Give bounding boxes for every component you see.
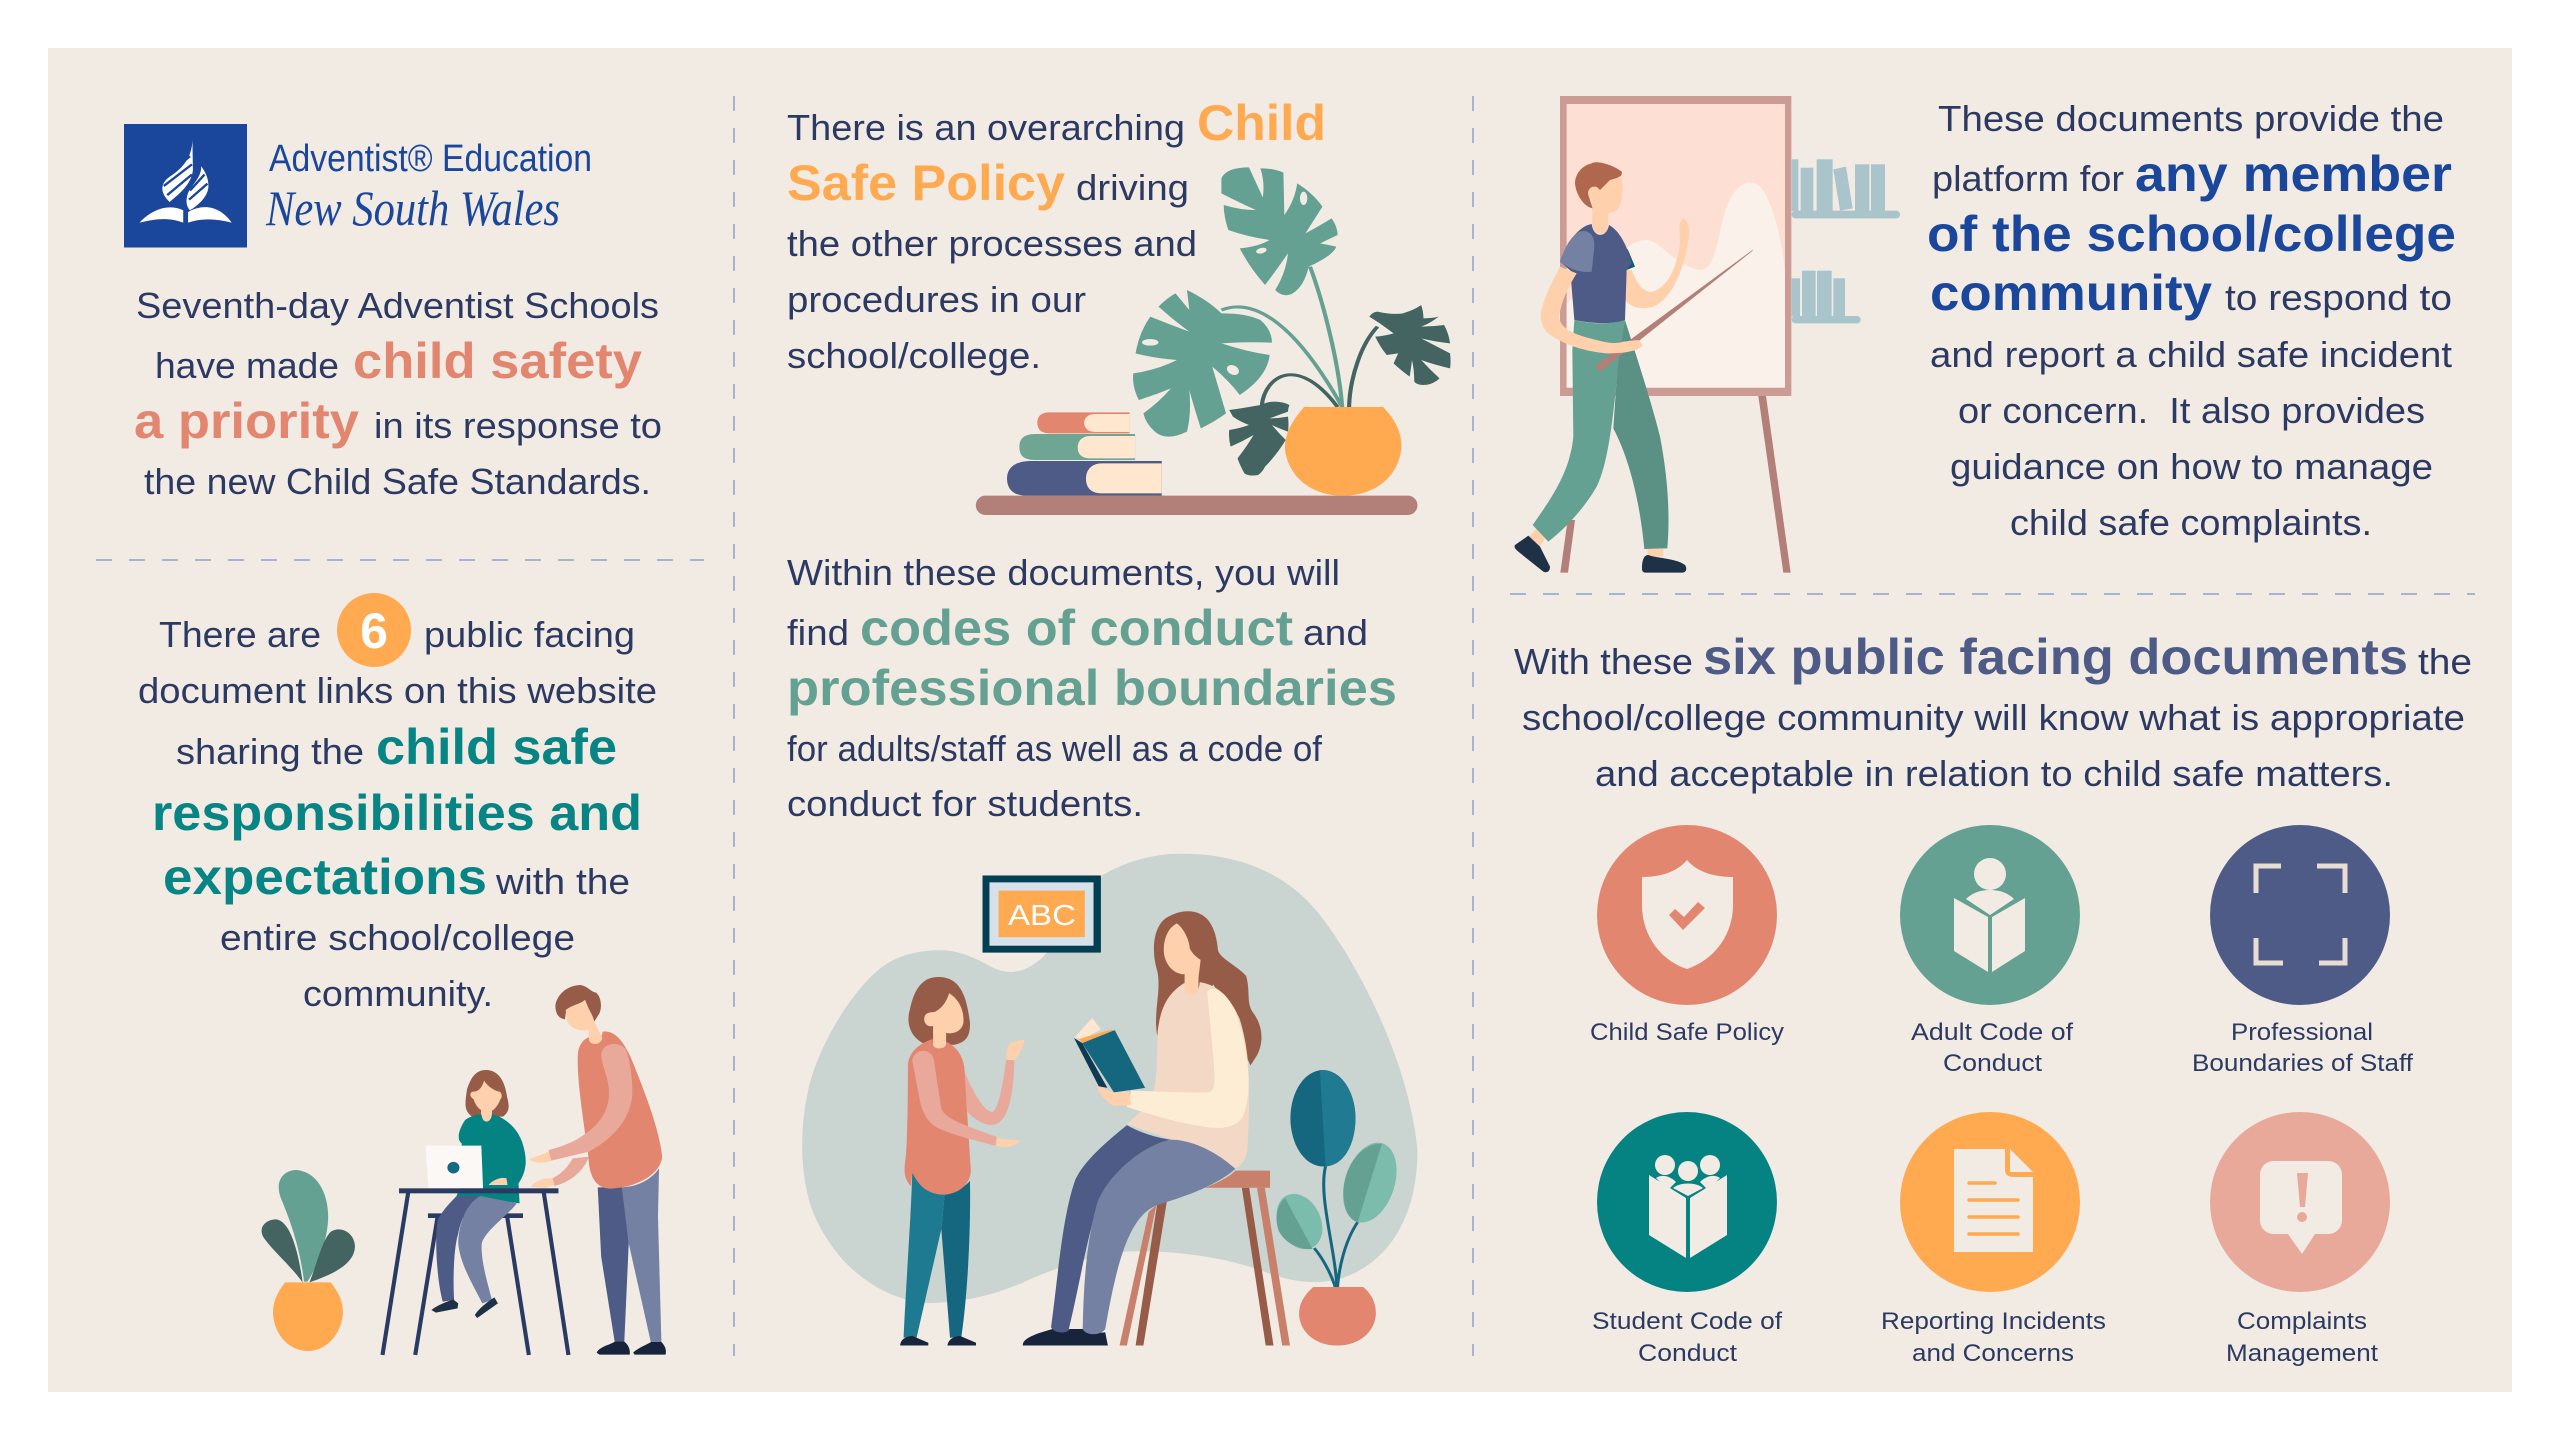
text: platform for any member [1927,98,2456,543]
text: codes of conduct: and [1303,612,1368,653]
intro text: child safety [353,333,642,389]
icon: Professional Boundaries of Staff: Professional [2231,1019,2373,1046]
intro text: a priority [134,393,359,449]
icon: Student Code of Conduct: Conduct [1638,1340,1737,1367]
icon: Adult Code of Conduct: Conduct [1943,1050,2042,1077]
icon: Reporting Incidents and Concerns: and Concerns [1912,1340,2074,1367]
text: platform for any member: of the school/college [1927,206,2456,262]
text: six public facing documents [1514,629,2472,794]
text: six public facing documents: six public facing documents [1703,629,2408,685]
illustration: teacher at easel with bookshelves [1515,96,1900,573]
panel: middle column [787,95,1451,1346]
text: platform for any member: These documents provide the [1938,98,2444,139]
text: six document links [138,593,657,1014]
person: teacher with pointer [1515,162,1753,573]
text: six document links: entire school/college [220,917,575,958]
illustration: staff helping student at desk [262,985,666,1355]
text: platform for any member: and report a child safe incident [1930,334,2452,375]
text: platform for any member: platform for [1932,158,2124,199]
panel: left column [124,124,666,1355]
intro text: in its response to [374,405,662,446]
text: platform for any member: any member [2135,146,2452,202]
text: codes of conduct: professional boundaries [787,660,1397,716]
text: child safe policy: driving [1076,167,1189,208]
illustration: woman reading to child: ABC [1008,900,1076,932]
text: six document links: child safe [376,719,617,775]
text: platform for any member: guidance on how to manage [1950,446,2433,487]
ABC frame [983,875,1101,953]
text: child safe policy: school/college. [787,335,1041,376]
text: child safe policy: Child [1197,95,1326,151]
logo: Adventist Education New South Wales: Adventist® Education [269,138,592,180]
panel: right column [1514,96,2472,1367]
desk top [399,1188,558,1193]
icon: Reporting Incidents and Concerns [1881,1112,2106,1367]
text: child safe policy [787,95,1326,376]
icon: Adult Code of Conduct: Adult Code of [1911,1019,2073,1046]
text: codes of conduct: for adults/staff as well as a code of [787,728,1323,769]
potted plant [1269,1070,1405,1346]
text: six document links: sharing the [176,731,364,772]
logo: Adventist Education New South Wales: New South Wales [265,180,560,236]
text: codes of conduct: Within these documents, you will [787,552,1340,593]
easel board [1560,96,1791,573]
desk legs and stool [383,1192,568,1355]
stack of books [1007,412,1162,496]
text: codes of conduct: codes of conduct [860,600,1293,656]
text: six document links: with the [495,861,630,902]
text: six public facing documents: With these [1514,641,1693,682]
icon: Student Code of Conduct: Student Code of [1592,1308,1782,1335]
text: child safe policy: procedures in our [787,279,1086,320]
person: seated student [426,1070,526,1318]
person: standing teacher [529,985,666,1355]
icon: Complaints Management [2210,1112,2390,1367]
text: platform for any member: child safe complaints. [2010,502,2372,543]
icon: Adult Code of Conduct [1900,825,2080,1077]
text: six document links: expectations [163,849,487,905]
text: child safe policy: the other processes and [787,223,1197,264]
monstera plant [1133,167,1451,496]
text: six document links: document links on this website [138,670,657,711]
person: woman reading [1023,911,1261,1346]
text: platform for any member: or concern. It also provides [1958,390,2425,431]
text: six public facing documents: school/college community will know what is appropriate [1522,697,2465,738]
shelf [976,496,1417,515]
text: six public facing documents: the [2418,641,2472,682]
background blob [802,854,1417,1303]
text: six document links: public facing [424,614,635,655]
icon: Professional Boundaries of Staff [2192,825,2413,1077]
icon: potted plant [262,1170,355,1351]
text: codes of conduct: find [787,612,849,653]
intro text: Seventh-day Adventist Schools [136,285,659,326]
icon: Complaints Management: Complaints [2237,1308,2367,1335]
intro text: the new Child Safe Standards. [144,461,651,502]
icon: Professional Boundaries of Staff: Boundaries of Staff [2192,1050,2413,1077]
text: six document links: community. [303,973,493,1014]
intro text [134,285,662,502]
intro text: have made [155,345,339,386]
illustration: woman reading to child [802,854,1417,1346]
bookshelves [1792,159,1900,323]
icon: Child Safe Policy [1590,825,1785,1046]
text: platform for any member: community [1930,265,2212,321]
person: child [900,977,1025,1346]
stool [1120,1171,1290,1346]
icon: Student Code of Conduct [1592,1112,1782,1367]
icon: Reporting Incidents and Concerns: Reporting Incidents [1881,1308,2106,1335]
text: six document links: responsibilities and [152,785,642,841]
icon: Complaints Management: Management [2226,1340,2378,1367]
text: six document links: 6 [360,603,388,659]
text: six document links: There are [159,614,321,655]
text: six public facing documents: and acceptable in relation to child safe matters. [1595,753,2393,794]
illustration: books and monstera plant on shelf [976,167,1451,515]
text: codes of conduct: conduct for students. [787,783,1143,824]
logo: Adventist Education New South Wales [124,124,592,248]
text: platform for any member: to respond to [2225,277,2452,318]
text: child safe policy: Safe Policy [787,155,1065,211]
icon: Child Safe Policy: Child Safe Policy [1590,1019,1785,1046]
text: codes of conduct [787,552,1397,824]
text: child safe policy: There is an overarching [787,107,1185,148]
